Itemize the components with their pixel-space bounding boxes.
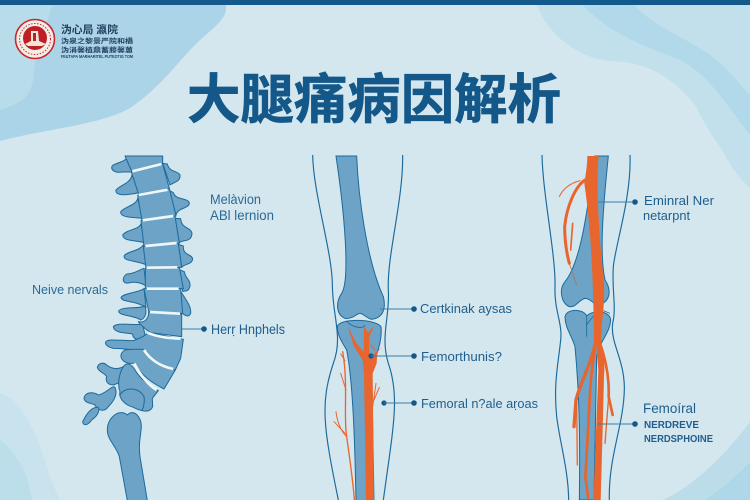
label: nerve left: Neive nervals	[32, 282, 108, 297]
callout: right label bottom	[598, 401, 713, 445]
vertebral bodies	[83, 156, 183, 425]
callout: right label top: Eminral Ner	[644, 193, 715, 208]
background blob: bottom right	[663, 422, 750, 500]
nerve branches	[559, 180, 613, 498]
left processes	[112, 156, 147, 340]
callout: herniation	[182, 322, 285, 337]
leg outline	[542, 155, 630, 500]
right processes	[163, 163, 193, 316]
label: melavion: Melàvion	[210, 192, 261, 207]
logo text: 沩泉之黎景严院和橋	[61, 36, 134, 45]
logo text: FEUTAPA MARHARITEL PUTEOTIG TOM	[61, 54, 133, 59]
logo text: 沩涓馨植鼎蓄藤馨蕙	[61, 45, 134, 54]
callout: centre label 3: Femoral n?ale aṛoas	[421, 396, 538, 411]
logo text	[61, 23, 134, 59]
tibia	[565, 310, 611, 500]
main nerve upper	[584, 156, 604, 343]
main nerve lower	[593, 340, 604, 500]
main nerve	[348, 326, 382, 500]
femur	[336, 156, 384, 319]
logo emblem	[16, 20, 54, 58]
callout: right label top: netarpnt	[643, 208, 690, 223]
femur	[561, 156, 609, 307]
callout: right label bottom: NERDREVE	[644, 420, 699, 431]
title: 大腿痛病因解析	[187, 57, 561, 134]
logo text: 沩心局 瀛院	[61, 23, 119, 36]
callout: right label bottom: Femoíral	[643, 401, 696, 416]
top bar	[0, 0, 750, 5]
label: ABl lernion: ABl lernion	[210, 208, 274, 223]
callout: centre label 2	[368, 349, 502, 364]
callout: centre label 2: Femorthunis?	[421, 349, 502, 364]
leg outline	[313, 155, 403, 500]
nerve branches	[334, 345, 379, 500]
femur	[107, 413, 147, 500]
tibia	[337, 320, 381, 500]
callout: herniation: Herṛ Hnphels	[211, 322, 285, 337]
callout: centre label 1	[380, 301, 512, 316]
background blob: top right	[537, 5, 750, 188]
background blob: bottom left	[0, 393, 60, 500]
right leg illustration	[542, 155, 630, 500]
background blob: top left	[0, 5, 226, 141]
callout: centre label 1: Certkinak aysas	[420, 301, 512, 316]
callout: right label top	[598, 193, 715, 223]
spine and hip illustration	[83, 156, 193, 500]
intervertebral discs	[132, 164, 181, 390]
callout: right label bottom: NERDSPHOINE	[644, 434, 713, 445]
middle leg illustration	[313, 155, 403, 500]
